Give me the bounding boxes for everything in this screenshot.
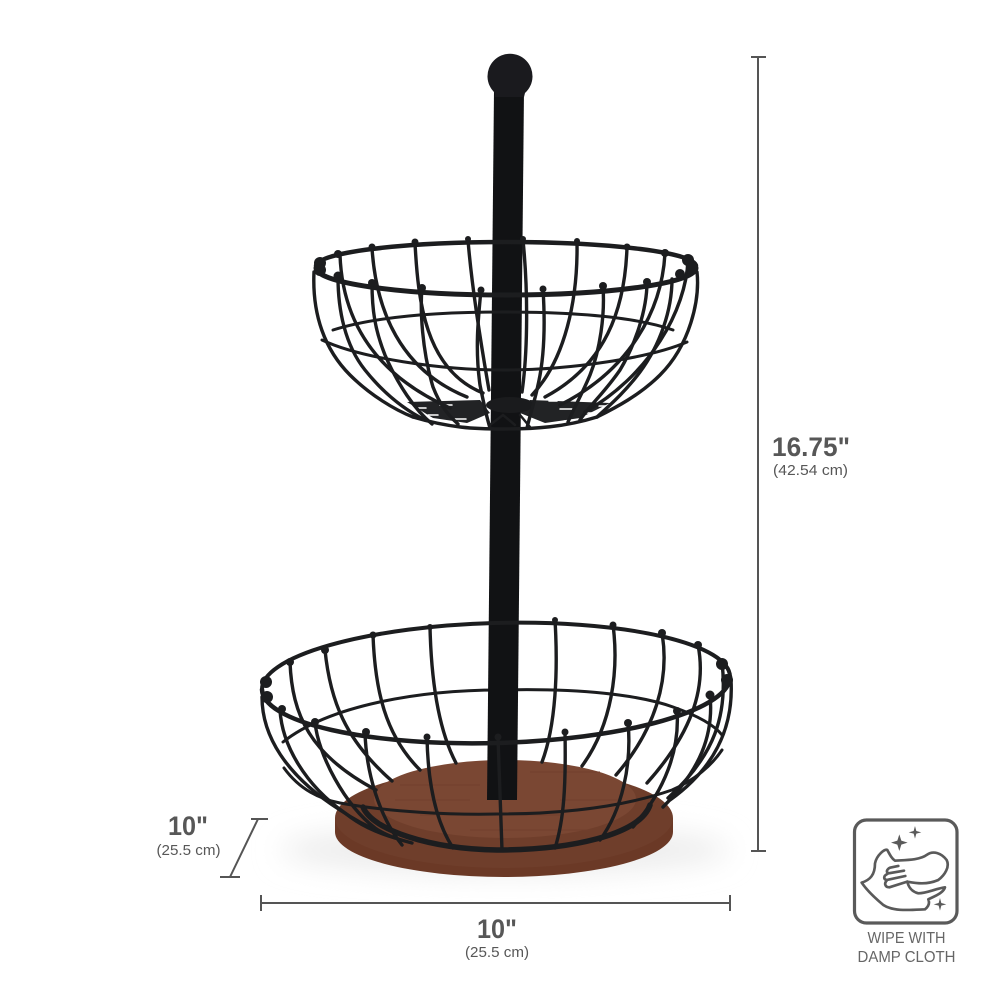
central post	[487, 54, 532, 800]
upper basket: front rim	[316, 268, 696, 295]
care label	[858, 930, 956, 966]
care label: DAMP CLOTH	[858, 949, 956, 966]
width label: 10"	[477, 914, 517, 944]
floor shadow	[280, 826, 730, 874]
depth label: (25.5 cm)	[156, 842, 220, 859]
lower basket: rim hooks	[260, 617, 733, 740]
wooden base	[335, 760, 673, 877]
care label: WIPE WITH	[868, 930, 946, 947]
icon: hand and cloth	[862, 826, 948, 911]
product: two-tier wire basket stand	[260, 54, 733, 877]
depth label: 10"	[168, 811, 208, 841]
height label: (42.54 cm)	[773, 462, 848, 479]
width label	[465, 914, 529, 961]
lower basket	[260, 617, 733, 850]
icon frame	[854, 820, 957, 923]
upper basket: centre plate	[486, 397, 534, 413]
sparkles	[891, 826, 946, 911]
upper basket: front wires	[314, 272, 698, 429]
depth dimension line	[220, 819, 268, 877]
lower basket: front rim	[262, 676, 730, 743]
width label: (25.5 cm)	[465, 944, 529, 961]
height dimension line	[751, 57, 766, 851]
upper basket: back wires	[333, 240, 688, 412]
lower basket: back rim	[262, 623, 730, 690]
upper basket: back rim	[316, 242, 696, 266]
care icon: wipe with damp cloth	[854, 820, 957, 923]
lower basket: back wires	[283, 620, 723, 798]
upper basket	[314, 236, 698, 429]
width dimension line	[261, 895, 730, 911]
height label: 16.75"	[772, 432, 850, 462]
height label	[772, 432, 850, 479]
lower basket: bottom ring	[363, 805, 650, 850]
upper basket: rim hooks	[314, 236, 698, 294]
depth label	[156, 811, 220, 859]
upper basket: base fan	[407, 400, 610, 423]
lower basket: front wires	[262, 680, 731, 850]
